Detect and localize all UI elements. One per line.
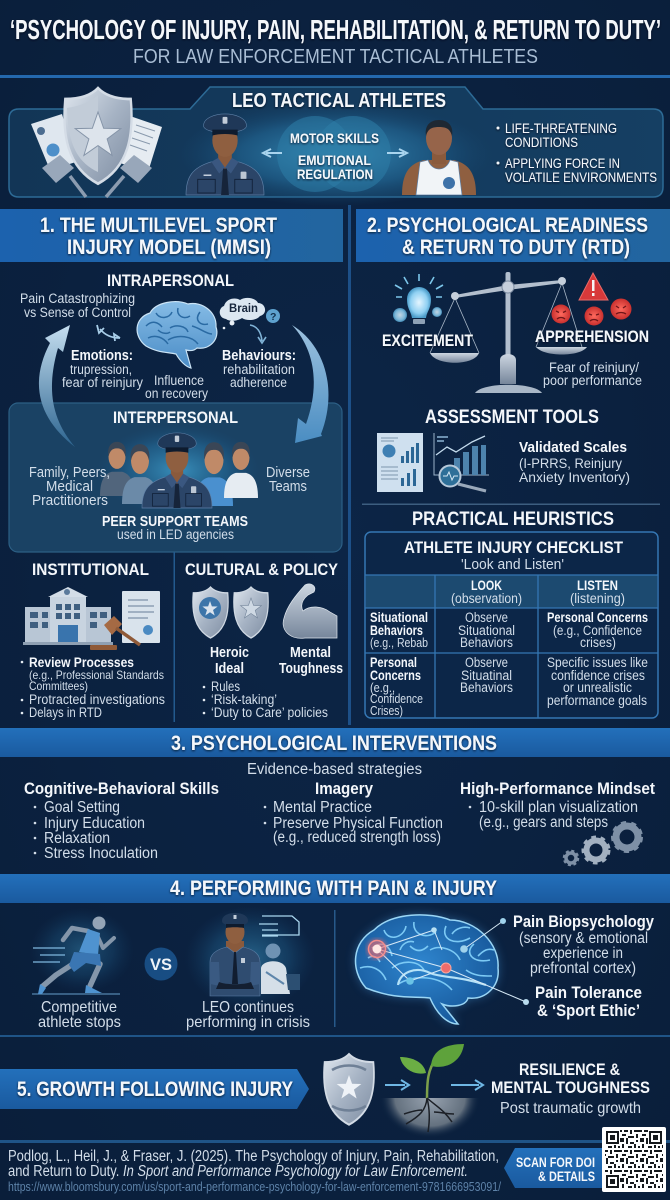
text: heroic ideal [210, 645, 249, 677]
column: imagery: Preserve Physical Function [273, 815, 443, 832]
header: section 3: 3. PSYCHOLOGICAL INTERVENTIONS [171, 732, 497, 755]
table row: situational behaviors: Observe [465, 610, 508, 625]
text: heroic ideal: Ideal [215, 661, 244, 677]
caption: LEO continues: LEO continues [202, 999, 294, 1016]
icon: gears [564, 823, 641, 865]
table row: personal concerns: confidence crises [551, 668, 645, 683]
text: diverse teams: Teams [269, 479, 307, 495]
citation: https://www.bloomsbury.com/us/sport-and-performance-psychology-for-law-enforcement-9781666953091/ [8, 1179, 501, 1194]
text: mental toughness [279, 645, 343, 677]
text: family peers: Family, Peers, [29, 465, 110, 481]
text: pain catastrophizing [20, 291, 135, 320]
text: pain catastrophizing: vs Sense of Control [24, 305, 131, 320]
table row: personal concerns: Crises) [370, 704, 403, 718]
column: cultural and policy [185, 560, 343, 720]
QR code [602, 1127, 666, 1192]
text: resilience outcome: RESILIENCE & [519, 1060, 620, 1079]
text: validated scales: (I-PRRS, Reinjury [519, 455, 622, 471]
seated casualty [261, 944, 300, 994]
table row: situational behaviors: Behaviors [460, 635, 513, 650]
panel: section 2 psychological readiness [356, 209, 670, 718]
table row: personal concerns: Concerns [370, 668, 421, 683]
arrow: sprout to resilience [451, 1080, 483, 1090]
list: institutional factors: Delays in RTD [29, 705, 102, 720]
table title: ATHLETE INJURY CHECKLIST [404, 538, 624, 557]
table row: personal concerns: Situatinal [461, 668, 512, 683]
header: section 1 [0, 209, 343, 262]
text: validated scales: Anxiety Inventory) [519, 469, 630, 485]
label: apprehension: APPREHENSION [535, 327, 649, 346]
list: LEO demands: LIFE-THREATENING [505, 120, 617, 136]
citation: and Return to Duty. In Sport and Performance Psychology for Law Enforcement. [8, 1163, 468, 1180]
text: emotions [62, 348, 143, 390]
illustration: running athlete [30, 908, 134, 994]
list: cultural factors: Rules [211, 679, 240, 694]
panel: section 3 interventions [0, 728, 670, 865]
table row: personal concerns: or unrealistic [563, 680, 632, 695]
arrow: right [387, 149, 407, 157]
list: institutional factors [21, 655, 165, 720]
venn diagram: shared skills: EMUTIONAL [298, 152, 371, 168]
heading: practical heuristics: PRACTICAL HEURISTICS [412, 509, 614, 530]
arrow: curved downward right [292, 325, 328, 443]
arrow: left [263, 149, 282, 157]
text: pain biopsychology: (sensory & emotional [519, 930, 648, 947]
callout: scan for DOI [504, 1148, 602, 1188]
venn diagram: shared skills [277, 116, 391, 192]
text: diverse teams [266, 465, 310, 495]
text: peer support teams [102, 513, 248, 542]
header: section 2 [356, 209, 670, 262]
text: pain catastrophizing: Pain Catastrophizing [20, 291, 135, 306]
panel: section 5 growth [0, 1044, 650, 1138]
venn diagram: shared skills: REGULATION [297, 166, 373, 182]
text: validated scales [519, 439, 630, 485]
list: cultural factors [203, 679, 328, 720]
list: institutional factors: Review Processes [29, 655, 134, 670]
table header: LISTEN [577, 578, 618, 593]
icon: report document [377, 433, 423, 492]
header: section 1: INJURY MODEL (MMSI) [67, 236, 271, 259]
icon: sprout with roots [384, 1044, 476, 1134]
arrow: badge to sprout [385, 1080, 409, 1090]
heading: interpersonal: INTERPERSONAL [113, 408, 238, 427]
column: cognitive-behavioral skills: Cognitive-Behavioral Skills [24, 779, 219, 798]
text: mental toughness: Toughness [279, 661, 343, 677]
text: pain biopsychology: prefrontal cortex) [530, 960, 636, 977]
column: imagery: Imagery [315, 779, 373, 798]
list: institutional factors: (e.g., Professional Standards [29, 668, 164, 682]
text: influence on recovery [145, 373, 208, 401]
heading: assessment tools: ASSESSMENT TOOLS [425, 407, 599, 428]
text: behaviours: adherence [230, 375, 287, 390]
text: pain biopsychology [513, 912, 654, 977]
list: LEO demands: CONDITIONS [505, 134, 578, 150]
table row: personal concerns: Personal [370, 655, 417, 670]
list: cultural factors: ‘Duty to Care’ policies [211, 705, 328, 720]
icon: flexed bicep [283, 584, 337, 638]
table title: 'Look and Listen' [461, 556, 564, 573]
column: imagery: Mental Practice [273, 799, 372, 816]
standing officer [210, 913, 260, 996]
text: diverse teams: Diverse [266, 465, 310, 481]
text: family peers: Practitioners [32, 493, 108, 509]
table row: personal concerns: (e.g., [370, 681, 395, 695]
heading: intrapersonal: INTRAPERSONAL [107, 271, 234, 290]
caption: competitive athlete [38, 999, 121, 1031]
column: high-performance mindset: High-Performance Mindset [460, 779, 655, 798]
callout: scan for DOI: & DETAILS [538, 1168, 595, 1184]
text: pain tolerance: Pain Tolerance [535, 983, 642, 1002]
column: cognitive-behavioral skills: Injury Education [44, 815, 145, 832]
header arrow: section 5: 5. GROWTH FOLLOWING INJURY [17, 1078, 293, 1101]
heading: LEO tactical athletes: LEO TACTICAL ATHLETES [232, 90, 446, 112]
table row: situational behaviors: (e.g., Confidence [553, 623, 642, 638]
panel: section 1 multilevel sport injury model [0, 209, 343, 722]
table row: situational behaviors: (e.g., Rebab [370, 635, 428, 650]
text: pain tolerance: & ‘Sport Ethic’ [537, 1001, 640, 1020]
table row: situational behaviors: Behaviors [370, 623, 423, 638]
header: section 2: & RETURN TO DUTY (RTD) [402, 236, 630, 259]
caption: competitive athlete: Competitive [41, 999, 117, 1016]
column: cognitive-behavioral skills: Goal Setting [44, 799, 120, 816]
citation: Podlog, L., Heil, J., & Fraser, J. (2025). The Psychology of Injury, Pain, Rehabilitation, [8, 1148, 499, 1165]
table header: (listening) [570, 591, 625, 606]
text: mental toughness: Mental [290, 645, 331, 661]
citation [8, 1148, 501, 1194]
text: heroic ideal: Heroic [210, 645, 249, 661]
text: family peers: Medical [46, 479, 93, 495]
icon: balance scale [430, 272, 587, 393]
text: peer support teams: PEER SUPPORT TEAMS [102, 513, 248, 530]
column: institutional: INSTITUTIONAL [32, 560, 149, 579]
icon: double arrow [97, 325, 120, 341]
panel: section 4 performing with pain [0, 874, 670, 1031]
text: family peers [29, 465, 110, 509]
table row: personal concerns: Observe [465, 655, 508, 670]
header: section 3 [0, 728, 670, 757]
column: imagery [264, 779, 443, 846]
icon: institution building, document, gavel [23, 587, 160, 650]
table row: situational behaviors: Situational [458, 623, 515, 638]
arrow: curved upward left [39, 325, 75, 447]
text: influence on recovery: Influence [154, 373, 204, 388]
figure glow [96, 424, 260, 516]
illustration: glowing brain with pain pathways [356, 915, 529, 1024]
text: behaviours [222, 348, 296, 390]
header: section 4 [0, 874, 670, 903]
text: peer support teams: used in LED agencies [117, 527, 234, 542]
text: validated scales: Validated Scales [519, 439, 627, 456]
label: excitement: EXCITEMENT [382, 331, 474, 350]
badge: versus [144, 948, 178, 980]
icon: warning and angry faces [552, 273, 632, 326]
panel: LEO tactical athletes [9, 87, 663, 206]
text: resilience outcome: MENTAL TOUGHNESS [491, 1078, 650, 1097]
figures: support team [100, 433, 258, 508]
central glow [177, 102, 493, 206]
figure: police officer [186, 114, 264, 195]
header: section 1: 1. THE MULTILEVEL SPORT [40, 214, 277, 237]
table header [451, 578, 625, 606]
table row: personal concerns: performance goals [547, 693, 647, 708]
icon: police badge [324, 1054, 374, 1125]
table row: situational behaviors [370, 610, 648, 650]
list: LEO demands [496, 120, 657, 185]
text: fear of reinjury: Fear of reinjury/ [549, 360, 639, 375]
icon: brain [137, 302, 217, 368]
text: influence on recovery: on recovery [145, 386, 208, 401]
column: high-performance mindset: (e.g., gears and steps [479, 814, 608, 831]
text: pain tolerance [535, 983, 642, 1020]
text: pain biopsychology: experience in [543, 945, 623, 962]
badge: versus: VS [150, 955, 172, 974]
table header: LOOK [471, 578, 502, 593]
callout: brain thought cloud: Brain [229, 301, 258, 315]
caption: LEO continues: performing in crisis [186, 1014, 310, 1031]
text: emotions: fear of reinjury [62, 375, 143, 390]
text: behaviours: Behaviours: [222, 348, 296, 364]
column: high-performance mindset [460, 779, 655, 831]
caption: competitive athlete: athlete stops [38, 1014, 121, 1031]
subheading: evidence-based strategies: Evidence-based strategies [247, 761, 422, 778]
table row: personal concerns: Confidence [370, 692, 423, 706]
column: cognitive-behavioral skills: Stress Inoculation [44, 845, 158, 862]
text: emotions: trupression, [70, 362, 132, 377]
table row: personal concerns [370, 655, 648, 718]
header arrow: section 5 [0, 1069, 309, 1109]
callout: scan for DOI: SCAN FOR DOI [516, 1154, 595, 1170]
caption: LEO continues [186, 999, 310, 1031]
illustration: officer continuing to perform [185, 906, 315, 1010]
list: cultural factors: ‘Risk-taking’ [211, 692, 277, 707]
table row: situational behaviors: crises) [580, 635, 616, 650]
list: institutional factors: Committees) [29, 679, 88, 693]
panel: interpersonal [9, 403, 342, 552]
icon: chart with magnifier [434, 433, 489, 491]
table row: personal concerns: Behaviors [460, 680, 513, 695]
text: resilience outcome: Post traumatic growth [500, 1100, 641, 1117]
callout: brain thought cloud: ? [270, 311, 276, 323]
icon: shield badge with documents and gavels [31, 88, 162, 197]
list: institutional factors: Protracted investigations [29, 692, 165, 707]
icon: light bulbs [393, 274, 443, 324]
table title [404, 538, 624, 573]
text: resilience outcome [491, 1060, 650, 1117]
column: high-performance mindset: 10-skill plan visualization [479, 799, 638, 816]
column: institutional [21, 560, 165, 720]
text: fear of reinjury [543, 360, 642, 388]
venn diagram: shared skills: MOTOR SKILLS [290, 130, 379, 146]
table header: (observation) [451, 591, 522, 606]
text: emotions: Emotions: [71, 348, 133, 364]
column: cognitive-behavioral skills [24, 779, 219, 862]
list: LEO demands: APPLYING FORCE IN [505, 155, 620, 171]
text: behaviours: rehabilitation [223, 362, 295, 377]
text: fear of reinjury: poor performance [543, 373, 642, 388]
column: imagery: (e.g., reduced strength loss) [273, 829, 441, 846]
table row: situational behaviors: Personal Concerns [547, 610, 648, 625]
table row: personal concerns: Specific issues like [547, 655, 648, 670]
table row: situational behaviors: Situational [370, 610, 428, 625]
column: cultural and policy: CULTURAL & POLICY [185, 560, 339, 579]
subtitle: FOR LAW ENFORCEMENT TACTICAL ATHLETES [133, 45, 538, 68]
callout: brain thought cloud [220, 298, 280, 343]
header: section 4: 4. PERFORMING WITH PAIN & INJURY [170, 877, 497, 900]
icon: two police badges [193, 587, 268, 638]
figure: athlete [402, 120, 476, 195]
column: cognitive-behavioral skills: Relaxation [44, 830, 110, 847]
table: athlete injury checklist [365, 532, 658, 718]
